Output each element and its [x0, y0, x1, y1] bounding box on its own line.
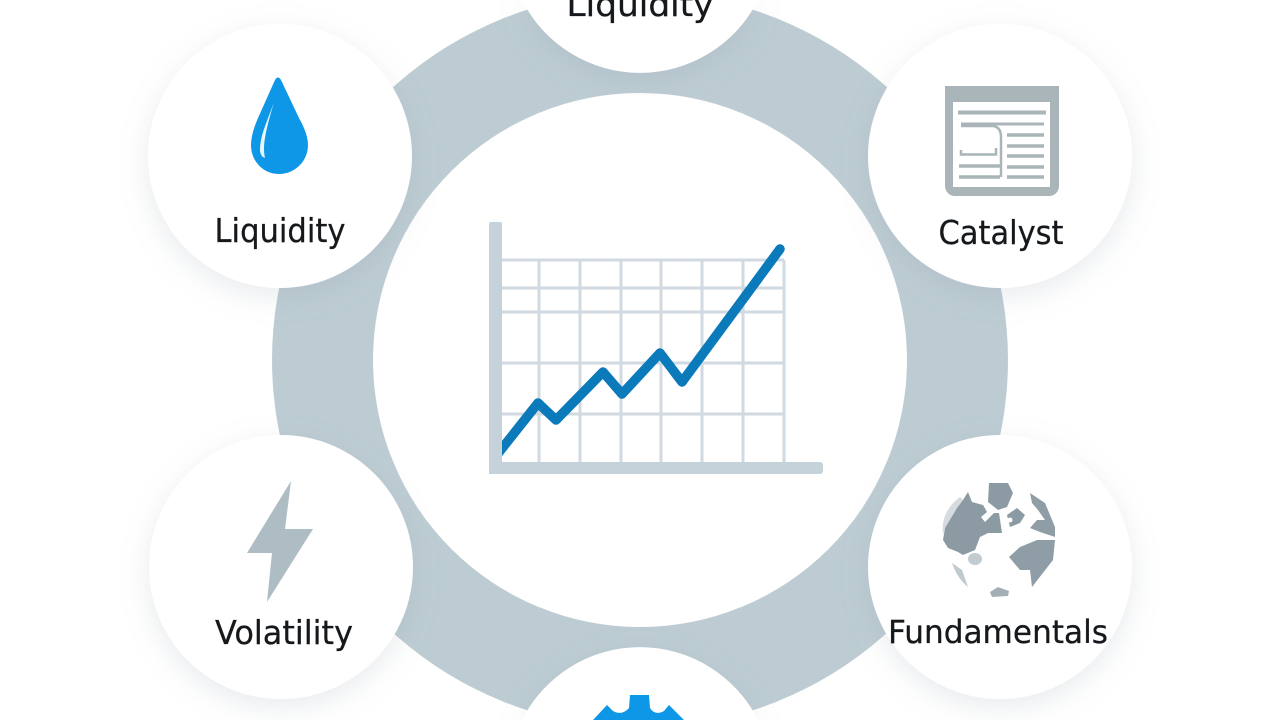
- outer ring: [272, 0, 1008, 720]
- label: catalyst: Catalyst: [938, 213, 1064, 252]
- label: volatility: Volatility: [215, 613, 353, 652]
- node: fundamentals: [868, 435, 1132, 699]
- center circle: [373, 93, 907, 627]
- icon: gear: [593, 695, 684, 720]
- icon: water drop: [251, 78, 308, 174]
- label: fundamentals: Fundamentals: [888, 613, 1108, 651]
- node: bottom gear: [522, 647, 758, 720]
- node: top liquidity: [522, 0, 758, 73]
- label: liquidity: Liquidity: [214, 211, 346, 250]
- node: liquidity: [148, 24, 412, 288]
- icon: newspaper: [945, 86, 1059, 196]
- node: catalyst: [868, 24, 1132, 288]
- central line chart: [489, 222, 823, 474]
- node: volatility: [149, 435, 413, 699]
- icon: lightning bolt: [247, 481, 313, 602]
- icon: globe: [943, 483, 1055, 597]
